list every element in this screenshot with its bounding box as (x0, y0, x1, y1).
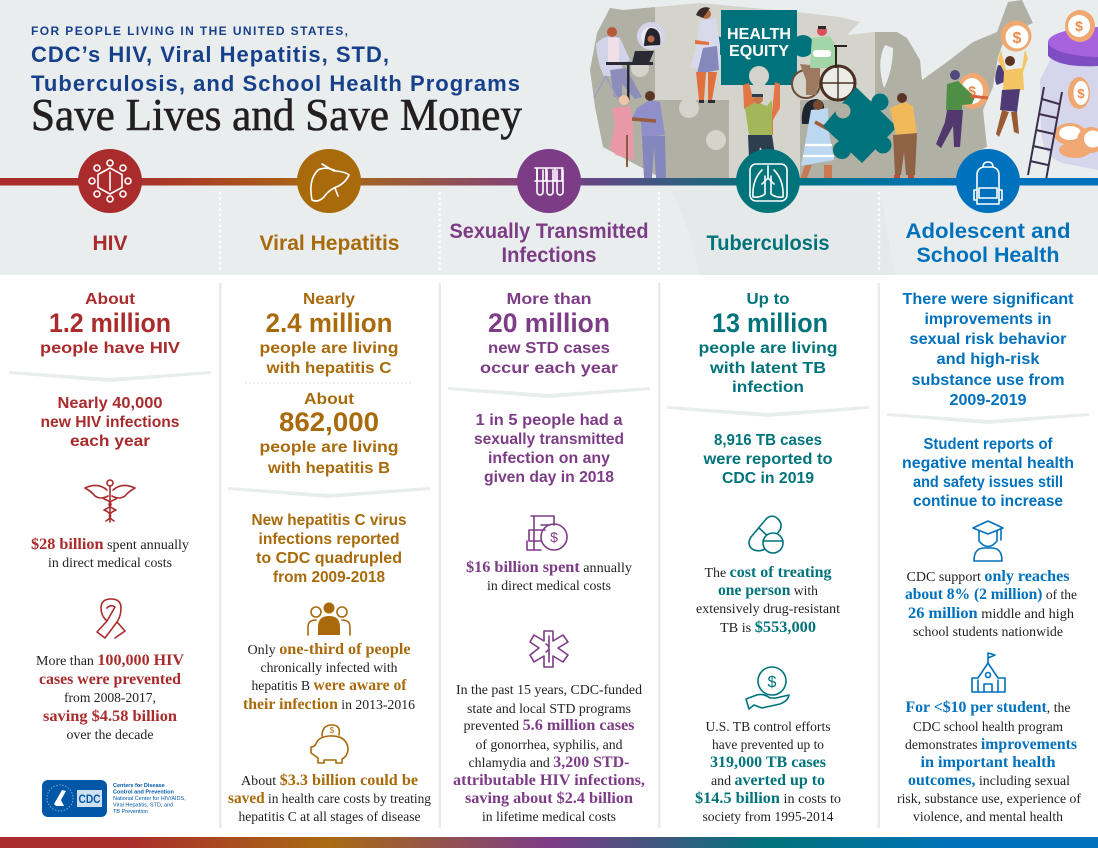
heading: Adolescent and School Health (906, 220, 1070, 267)
icon: health equity puzzle piece: HEALTH (727, 26, 791, 43)
text: cases prevented: More than 100,000 HIV (36, 652, 185, 669)
text: cost of treating (696, 564, 840, 636)
text: one-third aware: Only one-third of people (248, 641, 411, 658)
icon: teal puzzle diamond (823, 87, 897, 163)
woman holding coin overhead (995, 20, 1032, 137)
stat: new infections (40, 395, 180, 450)
icon: health equity puzzle piece: EQUITY (729, 43, 789, 60)
text: TB control efforts: $14.5 billion in costs to (695, 790, 841, 807)
stat: hepatitis C infections quadrupled: infections reported (258, 531, 400, 548)
person at laptop (594, 27, 654, 100)
text: cases prevented: saving $4.58 billion (43, 708, 177, 725)
dotted header dividers (220, 192, 879, 272)
text: programs prevented cases: In the past 15 years, CDC-funded (456, 682, 642, 697)
text: savings: saved in health care costs by treating (228, 790, 431, 807)
text: cost of treating: one person with (718, 582, 818, 599)
coin jar (1040, 10, 1098, 170)
text: school health program: For <$10 per student, the (906, 699, 1071, 716)
stat: new infections: each year (70, 433, 150, 450)
heading: Sexually Transmitted Infections: Sexually Transmitted (450, 220, 648, 243)
text: TB control efforts: and averted up to (711, 772, 825, 789)
text: TB control efforts: have prevented up to (712, 737, 824, 752)
title block: CDC’s HIV, Viral Hepatitis, STD, (31, 42, 389, 67)
bottom gradient bar (0, 837, 1098, 848)
icon: school (972, 653, 1005, 692)
text: savings: About $3.3 billion could be (241, 772, 418, 789)
title block: Save Lives and Save Money (31, 90, 522, 140)
stat: hepatitis C infections quadrupled: from 2009-2018 (273, 569, 385, 586)
text: programs prevented cases: attributable HIV infections, (453, 772, 645, 789)
icon: backpack (956, 149, 1020, 213)
faint map shadow (672, 190, 895, 275)
icon: caduceus (85, 480, 135, 522)
map tiles (585, 0, 1045, 182)
stat: improvements: 2009-2019 (950, 392, 1027, 409)
text: one-third aware: hepatitis B were aware of (252, 677, 407, 694)
icon: star of life (530, 631, 568, 667)
stat: latent TB (698, 291, 838, 396)
panel: viral hepatitis (228, 291, 431, 824)
text: CDC support reach: about 8% (2 million) of the (905, 586, 1077, 603)
stat: new STD cases (480, 291, 618, 377)
stat: hepatitis B: people are living (260, 439, 398, 456)
text: one-third aware (243, 641, 415, 713)
stat: hepatitis C: Nearly (303, 291, 355, 308)
text: direct cost: $16 billion spent annually (466, 559, 632, 576)
text: school health program: in important health (920, 754, 1056, 771)
stat: improvements (902, 291, 1074, 409)
stat: TB cases reported (702, 432, 833, 487)
heading: Adolescent and School Health: School Health (916, 244, 1060, 267)
text: TB control efforts: 319,000 TB cases (710, 754, 826, 771)
stat: latent TB: infection (732, 379, 804, 396)
stat: people with HIV (40, 291, 180, 357)
heading: HIV: HIV (92, 232, 128, 255)
stat: improvements: sexual risk behavior (910, 331, 1066, 348)
heading: Sexually Transmitted Infections: Infections (502, 244, 596, 267)
column dividers (219, 283, 880, 828)
stat: new infections: new HIV infections (40, 414, 180, 431)
text: direct medical costs (31, 536, 189, 570)
text: school health program: violence, and mental health (913, 809, 1063, 824)
icon: hand holding dollar: $ (768, 674, 777, 691)
stat: improvements: improvements in (924, 311, 1052, 328)
CDC logo: National Center for HIV/AIDS, (113, 796, 186, 802)
CDC logo (42, 780, 186, 817)
stat: 1 in 5 people: 1 in 5 people had a (476, 412, 623, 429)
text: cases prevented (36, 652, 185, 742)
text: programs prevented cases: of gonorrhea, syphilis, and (476, 737, 623, 752)
stat: TB cases reported: 8,916 TB cases (714, 432, 822, 449)
person carrying coin: $ (968, 83, 976, 99)
heading: Tuberculosis: Tuberculosis (706, 232, 830, 255)
stat: hepatitis C infections quadrupled: New hepatitis C virus (252, 512, 407, 529)
white content area (0, 275, 1098, 837)
title block: Tuberculosis, and School Health Programs (31, 71, 520, 96)
text: CDC support reach: CDC support only reaches (906, 568, 1070, 585)
coin jar: $ (1077, 86, 1085, 101)
text: programs prevented cases: state and local STD programs (467, 701, 631, 716)
text: school health program: CDC school health program (913, 719, 1063, 734)
text: TB control efforts: society from 1995-2014 (702, 809, 834, 824)
text: programs prevented cases: chlamydia and 3,200 STD- (468, 754, 630, 771)
stat: hepatitis C: people are living (260, 340, 398, 357)
text: one-third aware: their infection in 2013-2016 (243, 696, 415, 713)
stat: 1 in 5 people: sexually transmitted (474, 431, 624, 448)
coin jar: $ (1075, 18, 1083, 34)
person lifting puzzle (743, 82, 780, 158)
text: school health program: demonstrates improvements (905, 736, 1077, 753)
stat: hepatitis B (260, 391, 398, 477)
icon: piggy bank (311, 725, 348, 763)
text: cases prevented: cases were prevented (39, 671, 181, 688)
text: direct cost: in direct medical costs (487, 578, 611, 593)
stat: latent TB: Up to (746, 291, 790, 308)
woman holding coin overhead: $ (1013, 30, 1022, 47)
text: TB control efforts (695, 719, 841, 824)
text: cost of treating: TB is $553,000 (720, 619, 816, 636)
icon: money and documents (527, 516, 567, 550)
ladder (1028, 87, 1062, 180)
stat: student reports: negative mental health (902, 455, 1074, 472)
text: CDC support reach: school students nationwide (913, 624, 1063, 639)
title block (31, 24, 522, 140)
stat: hepatitis C: 2.4 million (266, 308, 392, 338)
timeline bar (0, 178, 1098, 186)
CDC logo: Control and Prevention (113, 790, 174, 796)
stat: new STD cases: 20 million (488, 308, 610, 338)
stat: hepatitis C: with hepatitis C (265, 360, 392, 377)
text: programs prevented cases (453, 682, 645, 824)
stat: latent TB: with latent TB (709, 360, 826, 377)
stat: 1 in 5 people: infection on any (488, 450, 610, 467)
CDC logo: CDC (78, 792, 101, 806)
heading: Viral Hepatitis: Viral Hepatitis (260, 232, 400, 255)
icon: liver (297, 149, 361, 213)
icon: pills (749, 516, 783, 553)
text: direct cost (466, 559, 632, 593)
text: savings (228, 772, 431, 824)
stat: people with HIV: people have HIV (40, 340, 180, 357)
text: cases prevented: from 2008-2017, (64, 690, 156, 705)
stat: new STD cases: occur each year (480, 360, 618, 377)
icon: health equity puzzle piece (703, 10, 814, 86)
text: cost of treating: extensively drug-resistant (696, 601, 840, 616)
heading: Sexually Transmitted Infections (450, 220, 648, 267)
text: school health program: risk, substance use, experience of (897, 791, 1082, 806)
stat: new STD cases: new STD cases (488, 340, 610, 357)
person carrying coin (936, 70, 989, 148)
panel: tuberculosis (667, 291, 869, 824)
stat: improvements: substance use from (912, 372, 1064, 389)
heading: Adolescent and School Health: Adolescent and (906, 220, 1070, 243)
CDC logo: Centers for Disease (113, 783, 165, 789)
text: programs prevented cases: saving about $2.4 billion (465, 790, 633, 807)
text: one-third aware: chronically infected with (260, 660, 398, 675)
chevron divider (9, 371, 211, 382)
avatar bubble (637, 22, 665, 50)
stat: hepatitis C infections quadrupled: to CDC quadrupled (256, 550, 402, 567)
CDC logo: TB Prevention (113, 809, 148, 815)
stat: hepatitis B: with hepatitis B (267, 460, 390, 477)
stat: people with HIV: About (85, 291, 136, 308)
text: savings: hepatitis C at all stages of disease (238, 809, 421, 824)
text: school health program (897, 699, 1082, 824)
icon: money and documents: $ (550, 529, 558, 545)
stat: TB cases reported: were reported to (702, 451, 833, 468)
text: school health program: outcomes, including sexual (908, 772, 1070, 789)
icon: graduate (973, 521, 1003, 561)
person in wheelchair (792, 26, 855, 100)
CDC logo: Viral Hepatitis, STD, and (113, 802, 173, 808)
text: TB control efforts: U.S. TB control efforts (706, 719, 830, 734)
stat: student reports: Student reports of (924, 436, 1053, 453)
icon: people (308, 602, 350, 635)
stat: hepatitis C (260, 291, 398, 377)
icon: HIV virus (78, 149, 142, 213)
stat: people with HIV: 1.2 million (49, 308, 171, 338)
illustration: US map puzzle with people (585, 0, 1098, 182)
text: CDC support reach: 26 million middle and high (908, 605, 1074, 622)
elder and nurse (610, 91, 666, 178)
icon: ribbon (97, 599, 125, 638)
stat: student reports (902, 436, 1074, 510)
icon: test tubes (517, 149, 581, 213)
title block: FOR PEOPLE LIVING IN THE UNITED STATES, (31, 24, 348, 38)
stat: hepatitis B: About (304, 391, 355, 408)
text: programs prevented cases: in lifetime medical costs (482, 809, 616, 824)
stat: latent TB: people are living (698, 340, 838, 357)
stat: latent TB: 13 million (712, 308, 828, 338)
header background (0, 0, 1098, 275)
stat: 1 in 5 people (474, 412, 624, 486)
text: cost of treating: The cost of treating (704, 564, 832, 581)
text: direct medical costs: $28 billion spent annually (31, 536, 189, 553)
text: direct medical costs: in direct medical costs (48, 555, 172, 570)
icon: hand holding dollar (746, 667, 789, 709)
stat: hepatitis C infections quadrupled (252, 512, 407, 586)
woman in blue dress (800, 99, 835, 180)
icon: piggy bank: $ (330, 726, 335, 735)
stat: 1 in 5 people: given day in 2018 (484, 469, 614, 486)
panel: adolescent and school health (887, 291, 1089, 824)
panel: HIV (9, 291, 211, 817)
stat: improvements: and high-risk (936, 351, 1040, 368)
stat: improvements: There were significant (902, 291, 1074, 308)
stat: student reports: and safety issues still (913, 474, 1063, 491)
text: cases prevented: over the decade (66, 727, 154, 742)
stat: TB cases reported: CDC in 2019 (722, 470, 814, 487)
icon: lungs (736, 149, 800, 213)
stat: new infections: Nearly 40,000 (58, 395, 163, 412)
panel: sexually transmitted infections (448, 291, 650, 824)
text: CDC support reach (905, 568, 1077, 639)
doctor (691, 7, 720, 103)
person in yellow shirt (890, 93, 917, 178)
text: programs prevented cases: prevented 5.6 million cases (464, 717, 634, 734)
stat: hepatitis B: 862,000 (279, 407, 379, 437)
stat: student reports: continue to increase (913, 493, 1063, 510)
stat: new STD cases: More than (506, 291, 592, 308)
